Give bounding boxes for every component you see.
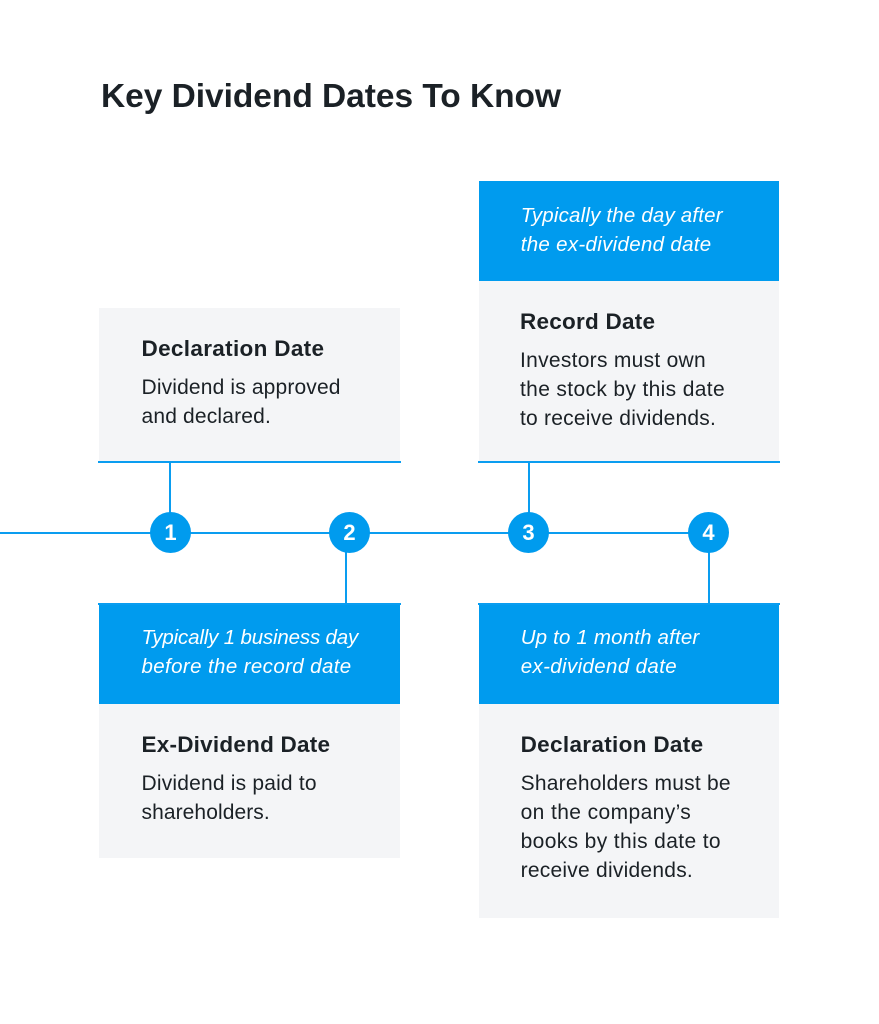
timing text <box>142 626 360 678</box>
heading: Record Date <box>520 309 655 334</box>
description <box>142 376 341 428</box>
connector <box>708 533 710 604</box>
description: receive dividends. <box>521 859 693 882</box>
heading: Ex-Dividend Date <box>142 732 330 757</box>
panel underline and connector <box>98 461 401 512</box>
panel background <box>99 308 400 461</box>
panel: declaration date bottom <box>478 552 780 918</box>
description <box>521 772 731 882</box>
timing text: Typically the day after <box>521 204 723 227</box>
timing text: the ex-dividend date <box>521 233 712 256</box>
timing text <box>521 626 700 678</box>
panel underline and connector <box>478 461 780 512</box>
blue timing header <box>99 603 400 704</box>
description: books by this date to <box>521 830 721 853</box>
description: on the company’s <box>521 801 691 824</box>
panel: declaration date top <box>98 308 401 512</box>
step marker 1: 1 <box>164 520 177 545</box>
description: Shareholders must be <box>521 772 731 795</box>
description <box>520 349 725 430</box>
panel background <box>479 281 779 461</box>
step marker 3 <box>508 512 549 553</box>
timing text: ex-dividend date <box>521 655 677 678</box>
timing text: Up to 1 month after <box>521 626 699 649</box>
blue timing header <box>479 181 779 281</box>
step marker 3: 3 <box>522 520 535 545</box>
timing text <box>521 204 724 256</box>
description: to receive dividends. <box>520 407 716 430</box>
timeline axis <box>0 532 709 534</box>
panel background <box>479 704 779 918</box>
description <box>142 772 317 824</box>
panel: record date <box>478 181 780 512</box>
timing text: Typically 1 business day <box>142 626 358 649</box>
step marker 4: 4 <box>702 520 715 545</box>
timing text: before the record date <box>142 655 352 678</box>
description: the stock by this date <box>520 378 725 401</box>
step marker 4 <box>688 512 729 553</box>
heading: Declaration Date <box>521 732 703 757</box>
heading: Declaration Date <box>142 336 324 361</box>
description: Investors must own <box>520 349 706 372</box>
blue timing header <box>479 603 779 704</box>
panel background <box>99 704 400 858</box>
panel: ex-dividend date <box>98 552 401 858</box>
description: shareholders. <box>142 801 270 824</box>
description: and declared. <box>142 405 271 428</box>
connector <box>345 533 347 604</box>
header top rule <box>98 603 401 605</box>
title: Key Dividend Dates To Know <box>101 78 561 115</box>
description: Dividend is paid to <box>142 772 317 795</box>
description: Dividend is approved <box>142 376 341 399</box>
step marker 2 <box>329 512 370 553</box>
header top rule <box>478 603 780 605</box>
step marker 2: 2 <box>343 520 356 545</box>
step marker 1 <box>150 512 191 553</box>
